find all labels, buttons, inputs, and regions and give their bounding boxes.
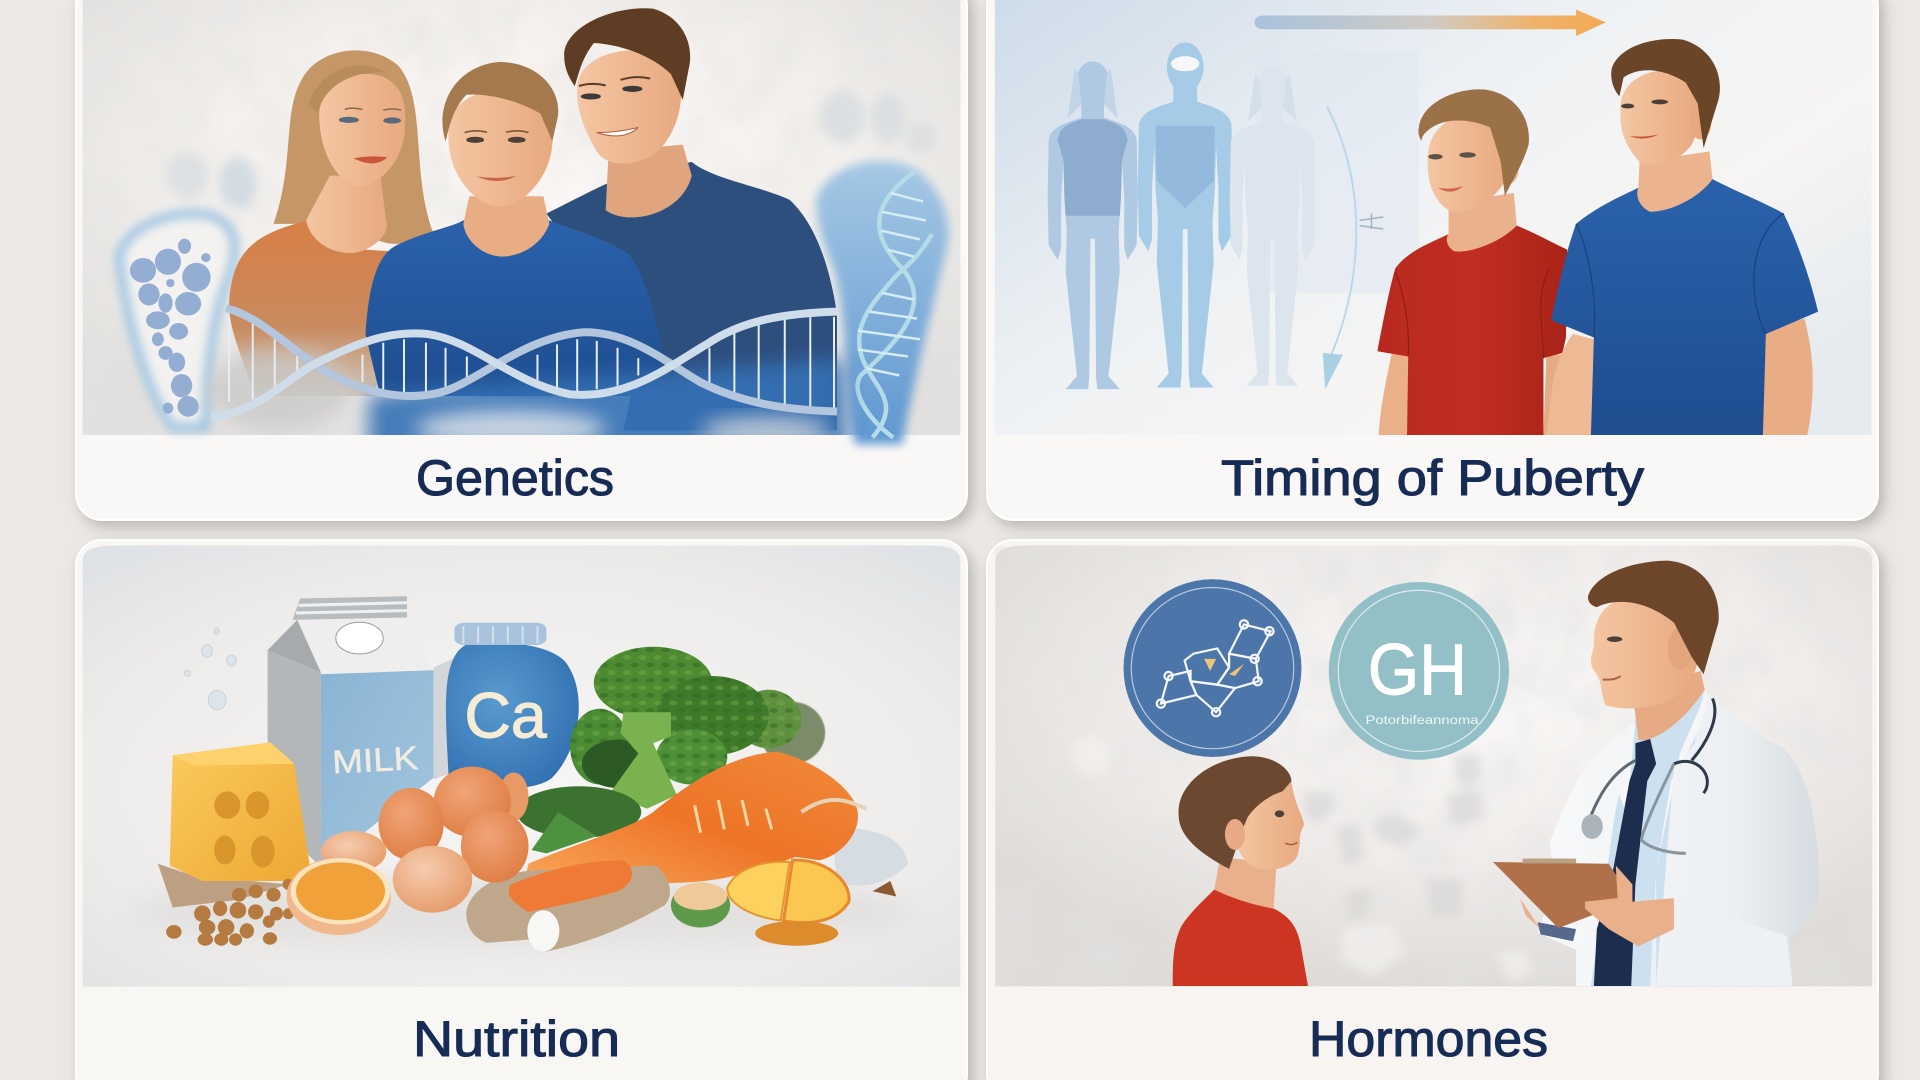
orange half [287, 858, 391, 935]
title: Hormones: Hormones [1309, 1011, 1548, 1067]
nutrition card [76, 540, 967, 1080]
hormones image background [995, 546, 1872, 986]
carrot-orange salmon [523, 752, 908, 896]
son [365, 62, 662, 396]
calcium label: Ca [465, 679, 547, 751]
ground shadow [131, 874, 914, 950]
right footprint with DNA helix [816, 90, 948, 444]
younger boy in red shirt [1377, 89, 1570, 435]
genetics image background [83, 0, 960, 435]
doctor coat [1538, 690, 1819, 986]
left footprint [119, 152, 257, 427]
genetics card [76, 0, 967, 520]
boy in red shirt [1173, 756, 1308, 986]
clipboard [1493, 862, 1632, 928]
fish fillet on bone [466, 860, 670, 952]
panel: timing of puberty [987, 0, 1878, 520]
mother [229, 50, 434, 396]
silhouette figure: left [1048, 61, 1138, 389]
neck and head [1632, 671, 1705, 740]
necktie [1594, 739, 1656, 986]
nuts [166, 879, 294, 946]
genetics illustration [83, 0, 960, 455]
title: Timing of Puberty: Timing of Puberty [1221, 450, 1644, 506]
sleeve cuff [1538, 922, 1576, 941]
older teen in blue shirt [1546, 39, 1818, 435]
lemon halves and small green fruit [671, 860, 849, 946]
panel: hormones [987, 540, 1878, 1080]
cheese and tray [158, 743, 312, 907]
faint square behind figures [1256, 52, 1419, 293]
watercolor wash [208, 348, 849, 455]
gradient timeline arrow [1255, 10, 1606, 36]
title: Genetics: Genetics [416, 450, 614, 506]
panel: nutrition [76, 540, 967, 1080]
mottled paper texture [995, 547, 1872, 986]
hormones card [987, 540, 1878, 1080]
doctor hands [1585, 865, 1674, 946]
father [546, 8, 837, 430]
GH label: GH [1368, 630, 1467, 710]
milk label: MILK [331, 739, 419, 780]
puberty illustration [995, 0, 1871, 435]
stethoscope [1591, 698, 1715, 853]
horizontal DNA helix [211, 308, 837, 417]
badge caption: Potorbifeannoma [1366, 715, 1479, 727]
silhouette figure: right [1230, 67, 1315, 386]
puberty image background [995, 0, 1871, 435]
panel: genetics [76, 0, 967, 520]
hormones illustration [995, 546, 1872, 986]
nutrition image background [83, 546, 960, 987]
calcium bottle [446, 623, 579, 788]
faint molecule background [1080, 749, 1530, 980]
milk carton [268, 596, 453, 867]
broccoli and greens [517, 647, 825, 853]
nutrition illustration [83, 546, 960, 987]
puberty card [987, 0, 1878, 520]
water droplets [185, 628, 236, 710]
downward curved arrow [1323, 107, 1383, 389]
doctor [1493, 561, 1819, 986]
steroid molecule badge [1124, 579, 1301, 757]
eggs [321, 767, 529, 913]
silhouette figure: centre [1138, 42, 1233, 387]
growth hormone badge [1329, 582, 1509, 760]
mottled paper texture [83, 0, 960, 435]
title: Nutrition: Nutrition [413, 1011, 620, 1067]
